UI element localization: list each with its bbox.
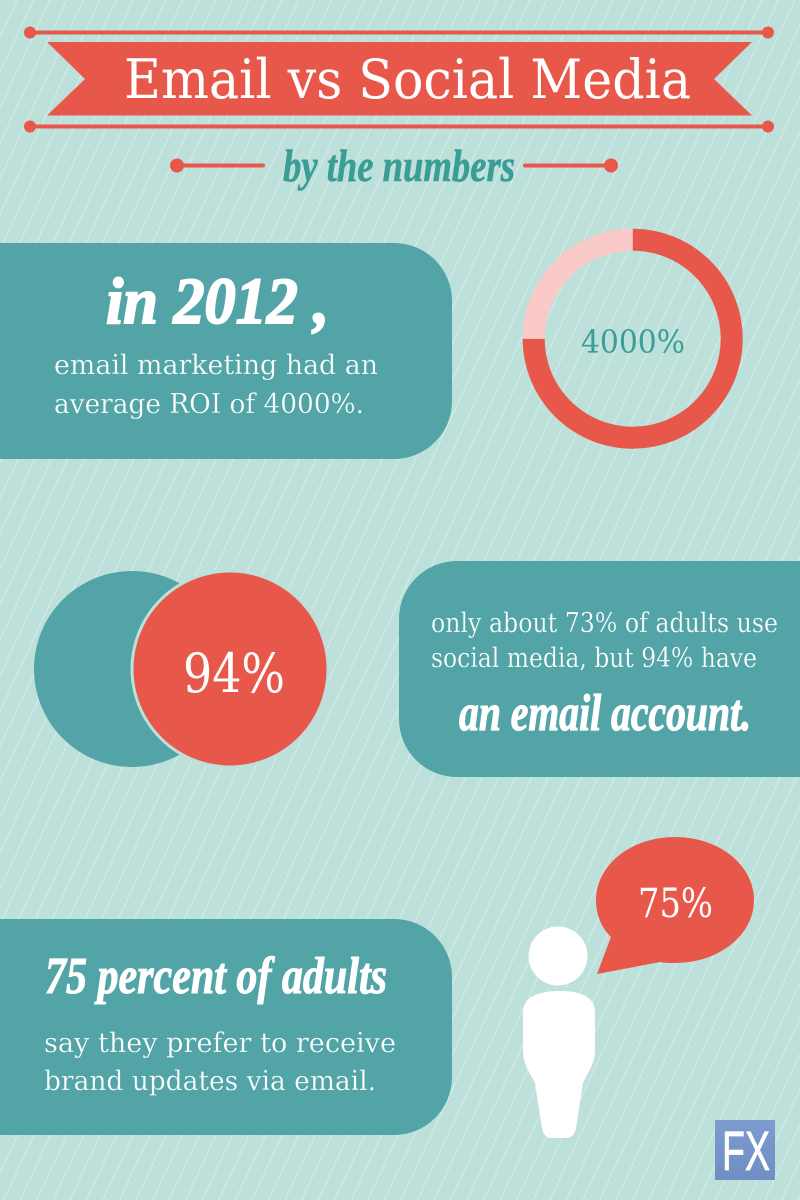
panel: 2012 ROI	[0, 243, 452, 459]
person head	[528, 926, 588, 986]
left rule	[170, 158, 265, 172]
panel: 75 percent	[0, 919, 452, 1135]
donut chart: 4000%	[534, 240, 732, 438]
title: Email vs Social Media	[124, 48, 691, 111]
coral circle	[134, 572, 326, 766]
overlapping circles: 94%	[34, 570, 330, 768]
ribbon	[47, 42, 752, 116]
title banner	[24, 26, 774, 132]
body text: brand updates via email.	[44, 1066, 376, 1097]
body text: email marketing had an	[54, 350, 378, 381]
top rule	[24, 26, 774, 38]
circle separator	[130, 570, 330, 768]
panel: email account	[399, 561, 800, 777]
donut main arc	[534, 240, 732, 438]
logo text: FX	[722, 1119, 770, 1182]
heading: 75 percent of adults	[45, 948, 387, 1005]
speech bubble: 75%	[596, 837, 754, 974]
body text: social media, but 94% have	[431, 643, 757, 674]
body text	[54, 350, 378, 420]
bubble shape	[596, 837, 754, 974]
panel background	[399, 561, 800, 777]
subtitle	[170, 140, 618, 191]
panel background	[0, 919, 452, 1135]
panel background	[0, 243, 452, 459]
circle label: 94%	[183, 642, 285, 705]
donut light arc	[534, 240, 633, 339]
body text: say they prefer to receive	[44, 1028, 396, 1059]
teal circle	[34, 571, 230, 767]
right rule	[523, 158, 618, 172]
logo: FX	[715, 1119, 775, 1182]
logo background	[715, 1120, 775, 1180]
bubble label: 75%	[638, 881, 713, 927]
body text: average ROI of 4000%.	[54, 389, 364, 420]
subtitle text: by the numbers	[283, 140, 515, 191]
icon: person	[523, 926, 595, 1138]
donut label: 4000%	[581, 323, 685, 361]
person body	[523, 991, 595, 1138]
heading: in 2012 ,	[106, 265, 329, 338]
bottom rule	[24, 120, 774, 132]
body text	[431, 608, 778, 674]
body text	[44, 1028, 396, 1097]
